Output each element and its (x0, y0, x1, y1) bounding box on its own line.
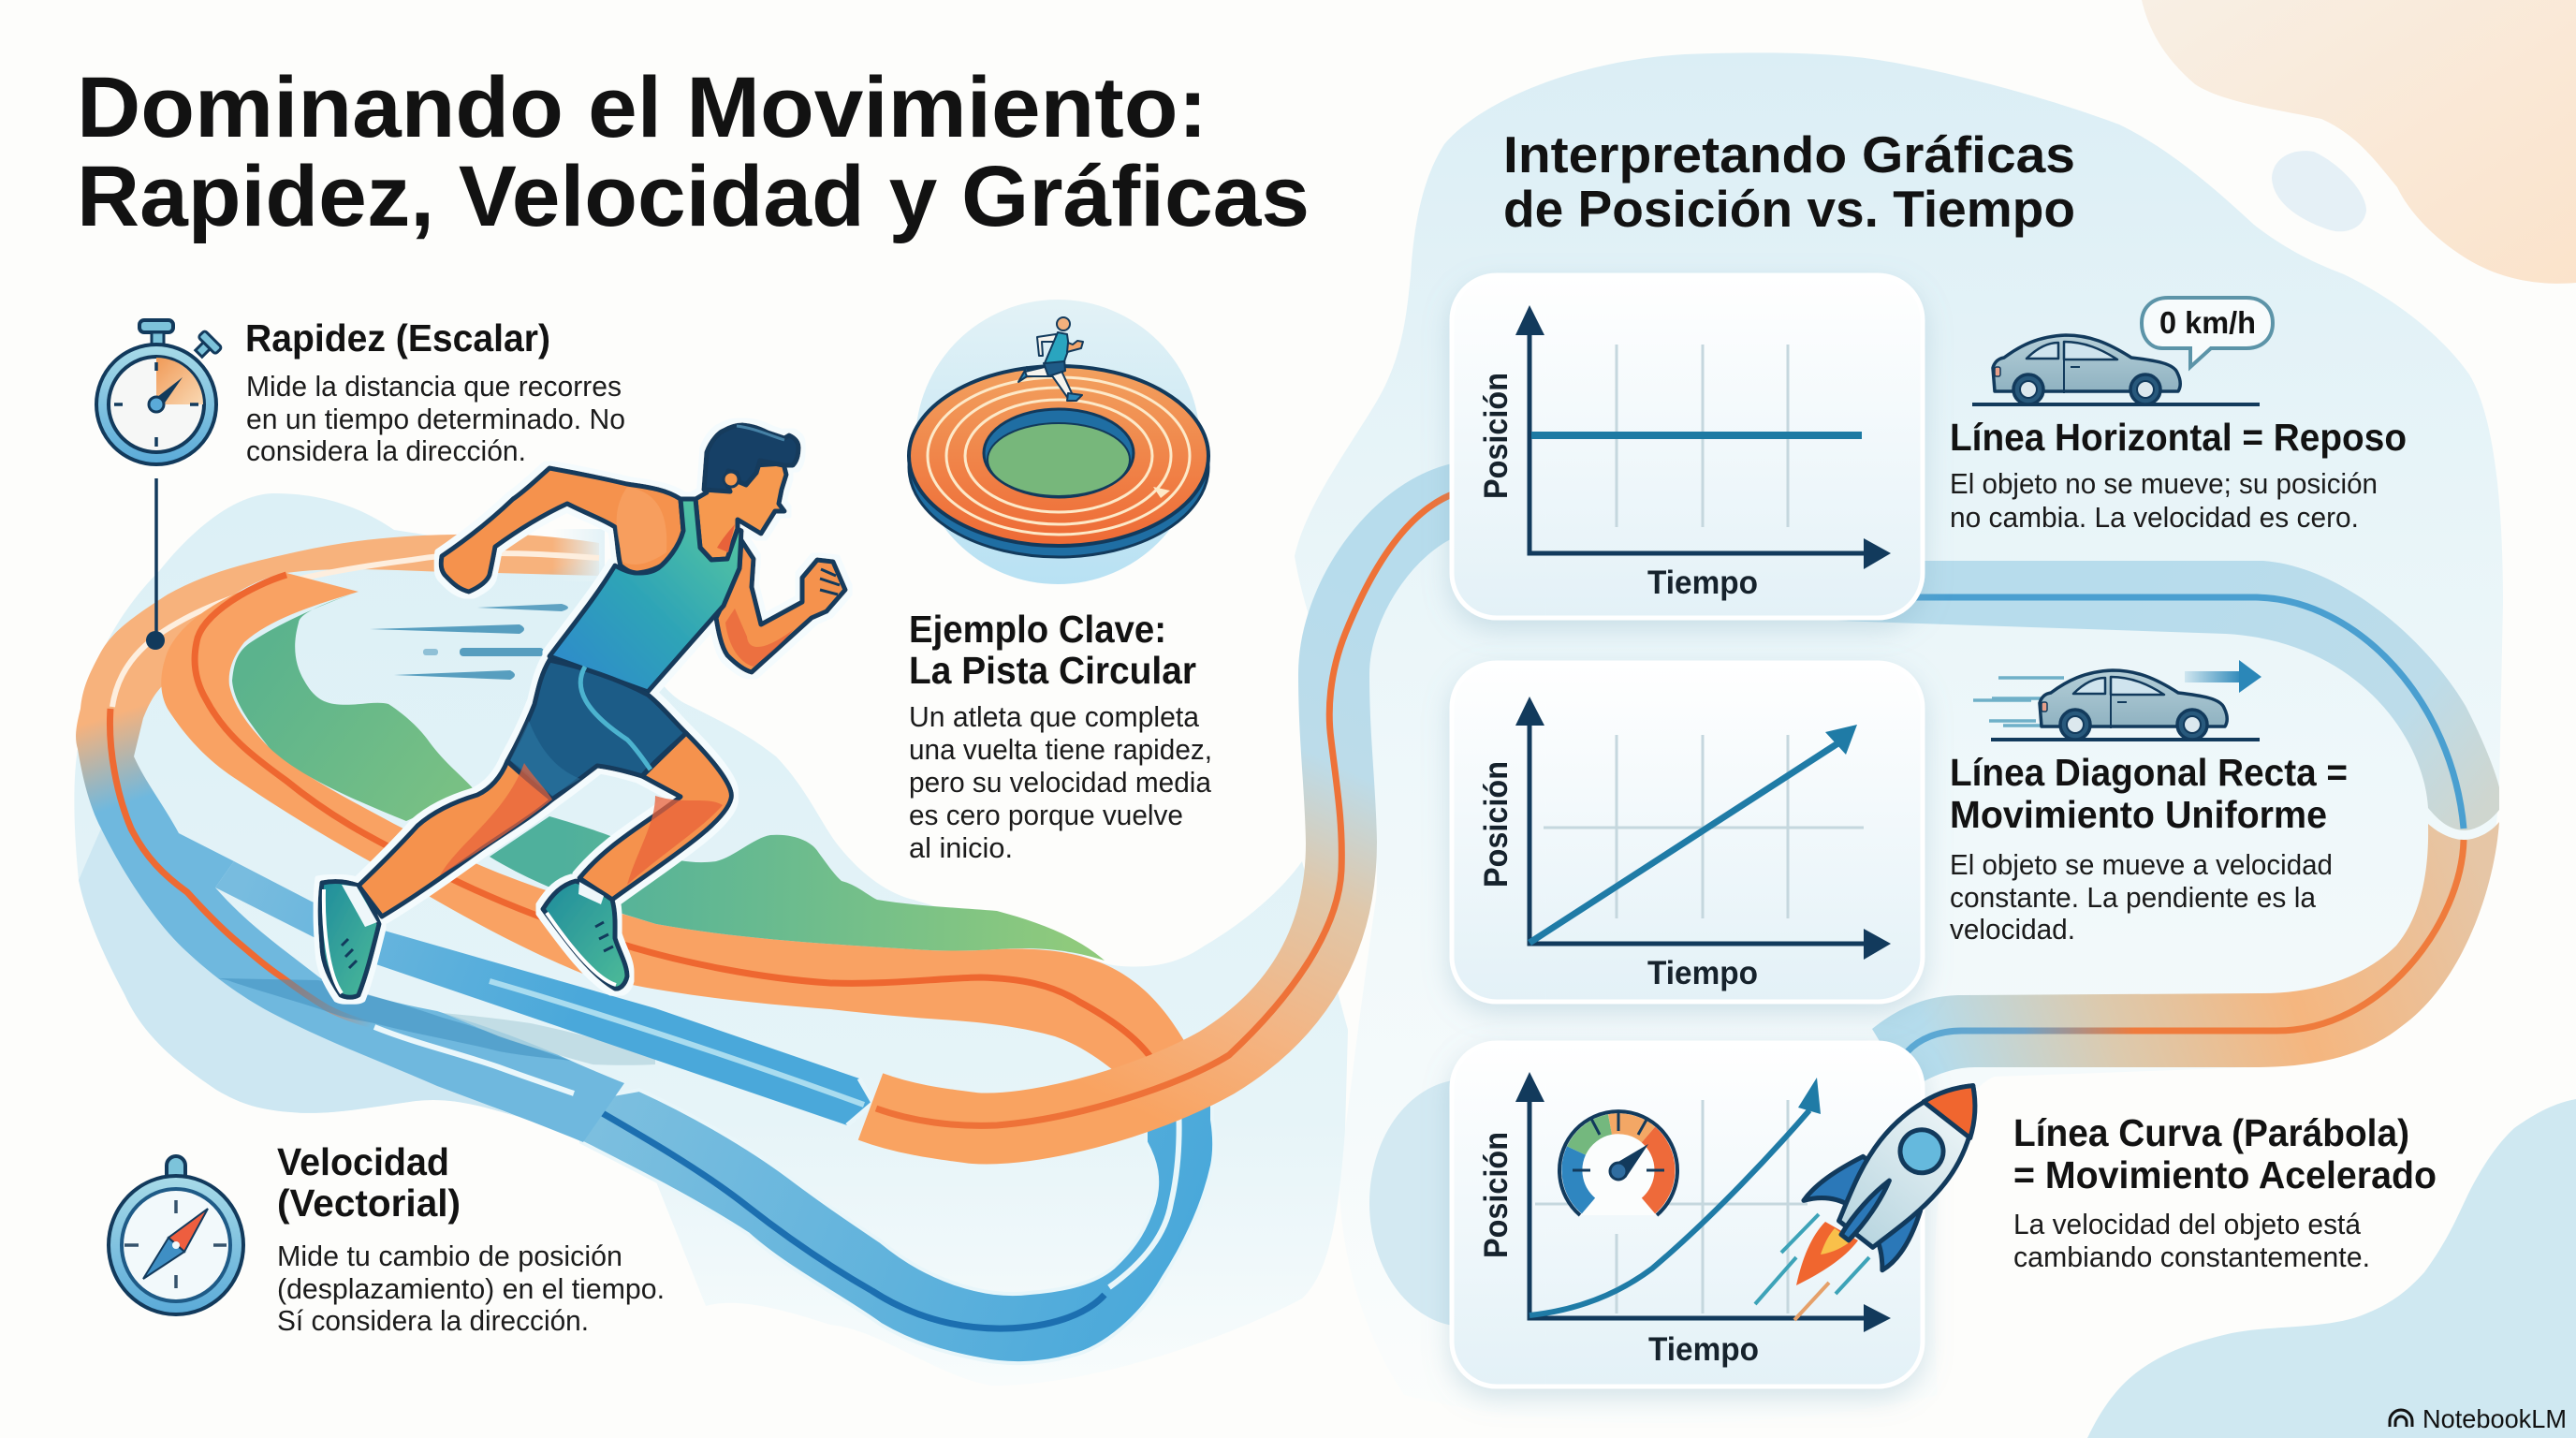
ribbon: top right blue line (1910, 597, 2464, 829)
connector line with dot (146, 478, 165, 650)
highlight stripe on outer band (112, 553, 599, 707)
text: velocidad: Velocidad (277, 1140, 449, 1183)
text: curved line: cambiando constantemente. (2013, 1240, 2370, 1273)
text: velocidad: (desplazamiento) en el tiempo. (277, 1272, 665, 1305)
shorts (507, 660, 686, 800)
ribbon: top right connector (1837, 561, 2499, 830)
red lane line on main band (195, 575, 1150, 1057)
text: rapidez: Rapidez (Escalar) (245, 316, 550, 360)
dark line on lower loop (581, 1101, 1105, 1328)
hills (232, 592, 1105, 961)
panel: graph diagonal line: Posición (1478, 761, 1515, 888)
ribbon: lower right line (1908, 840, 2464, 1051)
tank top (549, 499, 741, 692)
background blob: lower right (2087, 1099, 2576, 1438)
track ribbons: runner path (76, 529, 1214, 1363)
hair (704, 425, 798, 492)
highlight on blue bar (490, 981, 864, 1105)
text: velocidad (277, 1140, 665, 1337)
text: horizontal line: Línea Horizontal = Reposo (1950, 416, 2407, 459)
flame (1796, 1222, 1858, 1285)
panel: graph horizontal line (1452, 275, 1923, 618)
text: curved line: Línea Curva (Parábola) (2013, 1111, 2409, 1154)
text: ejemplo clave: es cero porque vuelve (909, 799, 1183, 831)
text: horizontal line: El objeto no se mueve; su posición (1950, 467, 2378, 500)
text: diagonal line: Movimiento Uniforme (1950, 793, 2327, 836)
panel: graph curved line (1452, 1043, 1923, 1387)
text: ejemplo clave (909, 608, 1212, 864)
icon: rocket (1755, 1047, 2009, 1320)
background blob: deeper tint under lower band (79, 829, 515, 1116)
text: horizontal line (1950, 416, 2407, 534)
white stripe on lower band (374, 1027, 574, 1093)
text: rapidez (245, 316, 625, 467)
text: diagonal line (1950, 751, 2348, 946)
background blob: behind third card (1369, 1079, 1560, 1327)
blue bar (215, 861, 873, 1125)
text: rapidez: en un tiempo determinado. No (246, 403, 625, 435)
background blob: peach top right (2142, 0, 2576, 284)
text: diagonal line: constante. La pendiente es la (1950, 881, 2317, 914)
main orange band (161, 573, 1189, 1070)
pale grey shadow (443, 1013, 655, 1065)
text: velocidad: Sí considera la dirección. (277, 1304, 589, 1337)
icon: parked car with speech bubble (1972, 298, 2273, 404)
text: ejemplo clave: Ejemplo Clave: (909, 608, 1166, 651)
front shoe (543, 881, 627, 989)
runner details (324, 426, 840, 993)
text: velocidad: (Vectorial) (277, 1181, 461, 1225)
icon: compass (109, 1156, 243, 1314)
background blob: right panel (1295, 52, 2503, 1423)
icon: circular track (909, 300, 1208, 584)
text: diagonal line: Línea Diagonal Recta = (1950, 751, 2348, 794)
panel: graph curved line: Tiempo (1648, 1331, 1759, 1368)
runner (320, 425, 845, 997)
text: curved line: = Movimiento Acelerado (2013, 1153, 2437, 1196)
text: rapidez: Mide la distancia que recorres (246, 370, 622, 403)
text: ejemplo clave: Un atleta que completa (909, 700, 1200, 733)
small runner (1018, 317, 1083, 401)
text: diagonal line: El objeto se mueve a velocidad (1950, 848, 2333, 881)
back shoe (320, 882, 379, 997)
icon: parked car with speech bubble: 0 km/h (2159, 305, 2256, 340)
icon: stopwatch (96, 320, 222, 464)
background blob: left runner area (74, 493, 1348, 1386)
end fade of outer band (552, 529, 605, 581)
front arm (716, 540, 845, 672)
front leg (579, 733, 731, 900)
motion lines (370, 604, 568, 680)
ribbon: lower right connector (1872, 822, 2499, 1091)
band shadow (218, 978, 571, 1061)
logo: NotebookLM: NotebookLM (2422, 1404, 2567, 1433)
panel: graph horizontal line: Posición (1478, 373, 1515, 499)
neck and head skin (695, 463, 786, 560)
back arm (441, 468, 683, 592)
white line on lower loop (1109, 1091, 1179, 1287)
text: curved line (2013, 1111, 2437, 1273)
text: ejemplo clave: al inicio. (909, 831, 1013, 864)
red lane line on outer band (110, 709, 372, 1025)
text: ejemplo clave: pero su velocidad media (909, 766, 1212, 799)
background blob: small blue spot (2272, 151, 2366, 231)
outer band going orange to blue (76, 534, 624, 1142)
text: rapidez: considera la dirección. (246, 434, 526, 467)
text: ejemplo clave: una vuelta tiene rapidez, (909, 733, 1212, 766)
panel: graph diagonal line: Tiempo (1647, 955, 1758, 991)
panel: graph curved line: Posición (1478, 1132, 1515, 1258)
back leg (359, 761, 552, 917)
heading: interpretando gráficas: de Posición vs. Tiempo (1503, 180, 2075, 238)
heading: interpretando gráficas: Interpretando Gráficas (1503, 125, 2075, 183)
ribbon: orange line (876, 492, 1460, 1125)
panel: graph horizontal line: Tiempo (1647, 565, 1758, 601)
text: horizontal line: no cambia. La velocidad es cero. (1950, 501, 2359, 534)
text: curved line: La velocidad del objeto está (2013, 1208, 2362, 1240)
text: diagonal line: velocidad. (1950, 913, 2075, 946)
text: ejemplo clave: La Pista Circular (909, 649, 1196, 692)
icon: moving car with arrow (1973, 660, 2261, 740)
title: Rapidez, Velocidad y Gráficas (77, 149, 1310, 244)
panel: graph diagonal line (1452, 663, 1923, 1002)
title: Dominando el Movimiento: (77, 60, 1208, 155)
title (77, 60, 1310, 244)
ear (724, 472, 739, 487)
lower blue loop (577, 1067, 1214, 1363)
icon: speedometer (1559, 1111, 1677, 1215)
speed streaks (1755, 1214, 1869, 1304)
ribbon: connector to first card (871, 498, 1460, 1129)
bar end cap (847, 1078, 873, 1125)
heading: interpretando gráficas (1503, 125, 2075, 238)
text: velocidad: Mide tu cambio de posición (277, 1240, 622, 1272)
